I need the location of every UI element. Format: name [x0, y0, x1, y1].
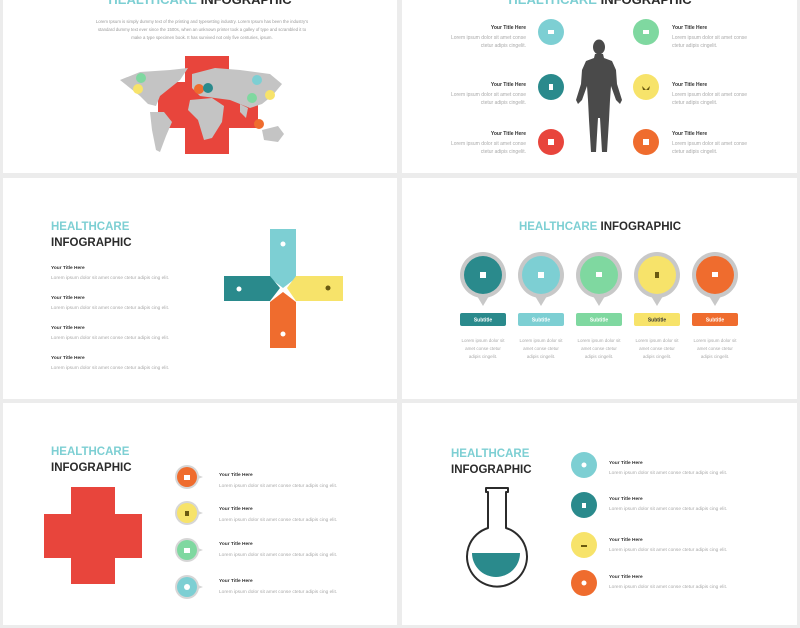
text items: ctetur adipis cingelit. [672, 43, 717, 49]
human silhouette [576, 40, 622, 152]
heading [51, 446, 132, 474]
text items: ctetur adipis cingelit. [481, 100, 526, 106]
panel: arrow cross slide [3, 178, 397, 399]
text items: Your Title Here [491, 25, 526, 31]
heading: INFOGRAPHIC [51, 462, 132, 474]
text items: Lorem ipsum dolor sit amet conse [672, 92, 747, 98]
list items: Your Title Here [609, 574, 643, 580]
descriptions: adipis cingelit. [527, 354, 555, 359]
list items: Lorem ipsum dolor sit amet conse ctetur adipis cing elit. [51, 335, 169, 341]
list items: Lorem ipsum dolor sit amet conse ctetur adipis cing elit. [609, 470, 727, 476]
red cross [44, 487, 142, 584]
subtitle bars: Subtitle [532, 318, 550, 324]
descriptions: adipis cingelit. [469, 354, 497, 359]
circle icons [175, 465, 203, 599]
descriptions [461, 338, 737, 359]
flask [467, 488, 527, 587]
text items: Lorem ipsum dolor sit amet conse [451, 141, 526, 147]
list items: Your Title Here [51, 355, 85, 361]
map markers [133, 73, 275, 129]
world map [120, 68, 284, 152]
descriptions: adipis cingelit. [643, 354, 671, 359]
text block: standard dummy text ever since the 1500s, when an unknown printer took a galley of type and scrambled it to [98, 27, 307, 32]
text items: Lorem ipsum dolor sit amet conse [451, 35, 526, 41]
list items [219, 472, 337, 595]
text block: make a type specimen book. It has survived not only five centuries, ipsum. [131, 35, 273, 40]
descriptions: amet conse ctetur [697, 346, 733, 351]
text items: Lorem ipsum dolor sit amet conse [672, 35, 747, 41]
panel: world map slide [3, 0, 397, 173]
circles icons [538, 19, 659, 155]
list items: Lorem ipsum dolor sit amet conse ctetur adipis cing elit. [51, 365, 169, 371]
arrow cross [224, 229, 343, 348]
panel: pins slide [402, 178, 797, 399]
subtitle bars: Subtitle [590, 318, 608, 324]
heading: HEALTHCARE [51, 221, 130, 233]
list items: Lorem ipsum dolor sit amet conse ctetur adipis cing elit. [219, 517, 337, 523]
descriptions: adipis cingelit. [585, 354, 613, 359]
text block [96, 19, 308, 40]
text items: Your Title Here [491, 131, 526, 137]
descriptions: Lorem ipsum dolor sit [635, 338, 679, 343]
list items: Your Title Here [609, 496, 643, 502]
panel: flask slide [402, 403, 797, 625]
heading [51, 221, 132, 249]
list items: Lorem ipsum dolor sit amet conse ctetur adipis cing elit. [609, 547, 727, 553]
descriptions: Lorem ipsum dolor sit [461, 338, 505, 343]
panel: red cross slide [3, 403, 397, 625]
descriptions: amet conse ctetur [523, 346, 559, 351]
list items: Your Title Here [51, 325, 85, 331]
subtitle bars [460, 313, 738, 326]
text items: Your Title Here [672, 25, 707, 31]
red cross [158, 56, 258, 154]
heading: HEALTHCARE [51, 446, 130, 458]
list items [609, 460, 727, 590]
text items: Lorem ipsum dolor sit amet conse [451, 92, 526, 98]
text items: Lorem ipsum dolor sit amet conse [672, 141, 747, 147]
descriptions: Lorem ipsum dolor sit [577, 338, 621, 343]
list items: Lorem ipsum dolor sit amet conse ctetur adipis cing elit. [219, 483, 337, 489]
circle icons [571, 452, 597, 596]
text items: ctetur adipis cingelit. [672, 149, 717, 155]
title: HEALTHCARE INFOGRAPHIC [519, 221, 681, 233]
pins [460, 252, 738, 306]
heading: INFOGRAPHIC [51, 237, 132, 249]
text items: ctetur adipis cingelit. [481, 149, 526, 155]
heading: HEALTHCARE [451, 448, 530, 460]
heading: INFOGRAPHIC [451, 464, 532, 476]
list items: Your Title Here [219, 472, 253, 478]
text items: ctetur adipis cingelit. [672, 100, 717, 106]
text items: ctetur adipis cingelit. [481, 43, 526, 49]
descriptions: amet conse ctetur [581, 346, 617, 351]
descriptions: Lorem ipsum dolor sit [693, 338, 737, 343]
list items: Your Title Here [219, 506, 253, 512]
list items: Your Title Here [51, 295, 85, 301]
descriptions: amet conse ctetur [639, 346, 675, 351]
descriptions: amet conse ctetur [465, 346, 501, 351]
list items: Your Title Here [51, 265, 85, 271]
descriptions: adipis cingelit. [701, 354, 729, 359]
text items: Your Title Here [491, 82, 526, 88]
descriptions: Lorem ipsum dolor sit [519, 338, 563, 343]
heading [451, 448, 532, 476]
list items: Your Title Here [219, 541, 253, 547]
list items: Lorem ipsum dolor sit amet conse ctetur adipis cing elit. [219, 552, 337, 558]
text items [451, 25, 747, 155]
subtitle bars: Subtitle [474, 318, 492, 324]
subtitle bars: Subtitle [706, 318, 724, 324]
panel: human body slide [402, 0, 797, 173]
list items: Your Title Here [219, 578, 253, 584]
list items: Lorem ipsum dolor sit amet conse ctetur adipis cing elit. [609, 584, 727, 590]
list items: Lorem ipsum dolor sit amet conse ctetur adipis cing elit. [609, 506, 727, 512]
list items: Lorem ipsum dolor sit amet conse ctetur adipis cing elit. [51, 305, 169, 311]
list items: Lorem ipsum dolor sit amet conse ctetur adipis cing elit. [51, 275, 169, 281]
text items: Your Title Here [672, 131, 707, 137]
subtitle bars: Subtitle [648, 318, 666, 324]
list items: Your Title Here [609, 537, 643, 543]
text items: Your Title Here [672, 82, 707, 88]
list items [51, 265, 169, 371]
list items: Your Title Here [609, 460, 643, 466]
text block: Lorem Ipsum is simply dummy text of the printing and typesetting industry. Lorem Ipsum has been the industry's [96, 19, 308, 24]
list items: Lorem ipsum dolor sit amet conse ctetur adipis cing elit. [219, 589, 337, 595]
